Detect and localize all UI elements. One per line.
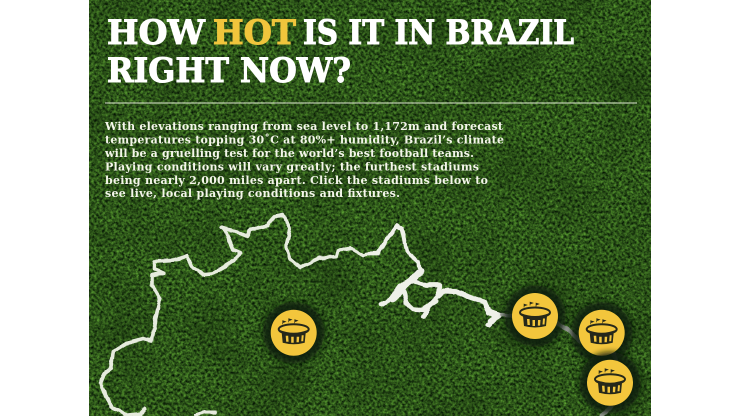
title: RIGHT NOW?: [107, 51, 351, 91]
intro text block: temperatures topping 30˚C at 80%+ humidity, Brazil’s climate: [105, 134, 504, 146]
intro text block: will be a gruelling test for the world’s best football teams.: [104, 147, 474, 160]
intro text block: [104, 120, 504, 200]
title: IS IT IN BRAZIL: [303, 13, 574, 53]
title: HOW: [107, 13, 206, 53]
intro text block: Playing conditions will vary greatly; the furthest stadiums: [105, 160, 479, 174]
stadium marker: north-east 1: [504, 285, 566, 347]
intro text block: being nearly 2,000 miles apart. Click the stadiums below to: [105, 174, 488, 187]
panel: grass background: [89, 0, 651, 416]
title: [107, 13, 574, 91]
stadium marker: north-east 2: [571, 302, 633, 364]
title: HOT: [213, 13, 296, 53]
map: Brazil outline: [100, 215, 617, 416]
stadium marker: central: [263, 302, 325, 364]
stadium marker: north-east 3: [579, 352, 641, 414]
intro text block: With elevations ranging from sea level to 1,172m and forecast: [104, 120, 504, 133]
intro text block: see live, local playing conditions and fixtures.: [105, 187, 400, 200]
